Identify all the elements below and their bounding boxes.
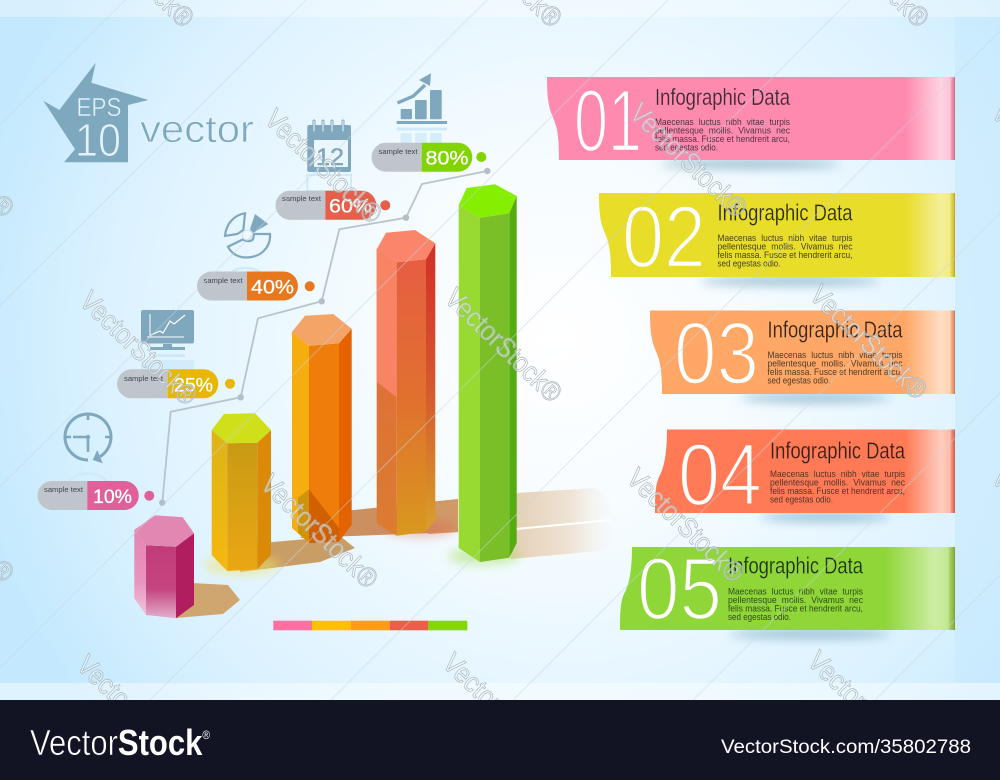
watermark text: VectorStock® [621, 462, 750, 589]
body text 01 [655, 117, 790, 152]
watermark text: VectorStock® [439, 282, 568, 409]
body text 03 [768, 350, 903, 386]
bar 2 yellow 25% [212, 413, 271, 571]
pill 60% [276, 191, 390, 220]
panel: banner 05 [620, 539, 955, 639]
pill label 60: sample text [282, 194, 322, 203]
watermark text: VectorStock® [624, 97, 753, 224]
icon: pie chart [225, 213, 270, 277]
pill dot 10 [144, 491, 154, 501]
number 02: 02 [622, 187, 706, 286]
pill label 40: sample text [204, 276, 243, 285]
body text 02: felis massa. Fusce et hendrerit arcu, [718, 250, 852, 260]
footer logo: VectorStock [30, 722, 216, 763]
watermark text: VectorStock® [804, 279, 933, 406]
number 05: 05 [637, 539, 722, 638]
body text 04: pellentesque mollis. Vivamus nec [770, 478, 905, 488]
pill dot 25 [225, 379, 235, 389]
body text 01: sed egestas odio. [655, 142, 718, 152]
body text 04 [770, 469, 905, 504]
heading 01: Infographic Data [655, 84, 791, 110]
pill value 10%: 10% [93, 486, 132, 508]
body text 02: Maecenas luctus nibh vitae turpis [718, 233, 853, 243]
logo 10: 10 [75, 114, 121, 166]
footer logo: ® [202, 728, 210, 742]
body text 03: felis massa. Fusce et hendrerit arcu, [768, 367, 902, 377]
panel: banner 01 [547, 71, 955, 170]
bar 5 green 80% [459, 184, 517, 562]
calendar number: 12 [316, 144, 344, 171]
color strip legend [273, 621, 467, 630]
body text 05: felis massa. Fusce et hendrerit arcu, [728, 604, 863, 614]
number 03: 03 [674, 304, 759, 402]
logo badge [43, 63, 148, 162]
panel: banner 04 [655, 425, 955, 524]
heading 02: Infographic Data [718, 200, 853, 226]
logo EPS: EPS [76, 92, 122, 122]
pill label 25: sample text [124, 374, 164, 383]
connector line [159, 168, 490, 506]
chart floor shadows [176, 488, 611, 618]
panel: banner 02 [599, 187, 955, 286]
footer url: VectorStock.com/35802788 [721, 736, 971, 758]
heading 05: Infographic Data [728, 552, 864, 578]
body text 04: Maecenas luctus nibh vitae turpis [770, 469, 905, 479]
number 04: 04 [678, 425, 762, 524]
body text 01: pellentesque mollis. Vivamus nec [655, 126, 790, 136]
body text 03: Maecenas luctus nibh vitae turpis [768, 350, 903, 360]
body text 02: sed egestas odio. [718, 258, 780, 268]
body text 04: felis massa. Fusce et hendrerit arcu, [770, 486, 905, 496]
body text 03: pellentesque mollis. Vivamus nec [768, 358, 903, 368]
icon: clock [65, 414, 111, 481]
icon: growth chart [397, 73, 447, 143]
pill value 60%: 60% [329, 196, 372, 218]
icon: calendar [307, 121, 351, 191]
watermark text: VectorStock® [74, 285, 203, 412]
pill value 80%: 80% [426, 148, 468, 170]
bar 4 red 60% [377, 230, 435, 536]
watermark text: VectorStock® [255, 468, 384, 595]
body text 02 [718, 233, 853, 268]
bar 3 orange 40% [292, 314, 352, 543]
pill 25% [117, 369, 235, 398]
icon: monitor chart [141, 310, 194, 369]
pill 80% [372, 143, 486, 172]
body text 05: pellentesque mollis. Vivamus nec [728, 595, 863, 605]
pill dot 40 [305, 281, 315, 291]
bar 1 pink 10% [134, 515, 194, 618]
body text 01: Maecenas luctus nibh vitae turpis [655, 117, 790, 127]
body text 01: felis massa. Fusce et hendrerit arcu, [655, 134, 790, 144]
pill dot 60 [380, 200, 390, 210]
pill value 40%: 40% [251, 276, 294, 298]
panel: banner 03 [650, 304, 955, 403]
heading 04: Infographic Data [770, 438, 906, 464]
logo word vector: vector [140, 109, 254, 151]
pill 40% [197, 272, 315, 300]
body text 04: sed egestas odio. [770, 494, 833, 504]
body text 05: Maecenas luctus nibh vitae turpis [728, 586, 863, 596]
pill value 25%: 25% [174, 374, 213, 396]
body text 03: sed egestas odio. [768, 376, 830, 386]
pill label 80: sample text [378, 147, 418, 156]
body text 02: pellentesque mollis. Vivamus nec [718, 242, 853, 252]
number 01: 01 [574, 71, 642, 170]
body text 05 [728, 586, 863, 622]
pill dot 80 [476, 152, 486, 162]
logo: EPS 10 vector [43, 63, 254, 166]
watermark text: VectorStock® [259, 103, 388, 230]
body text 05: sed egestas odio. [728, 612, 791, 622]
pill label 10: sample text [44, 485, 84, 494]
pill 10% [38, 481, 154, 510]
heading 03: Infographic Data [768, 316, 903, 342]
footer bar [0, 700, 1000, 780]
